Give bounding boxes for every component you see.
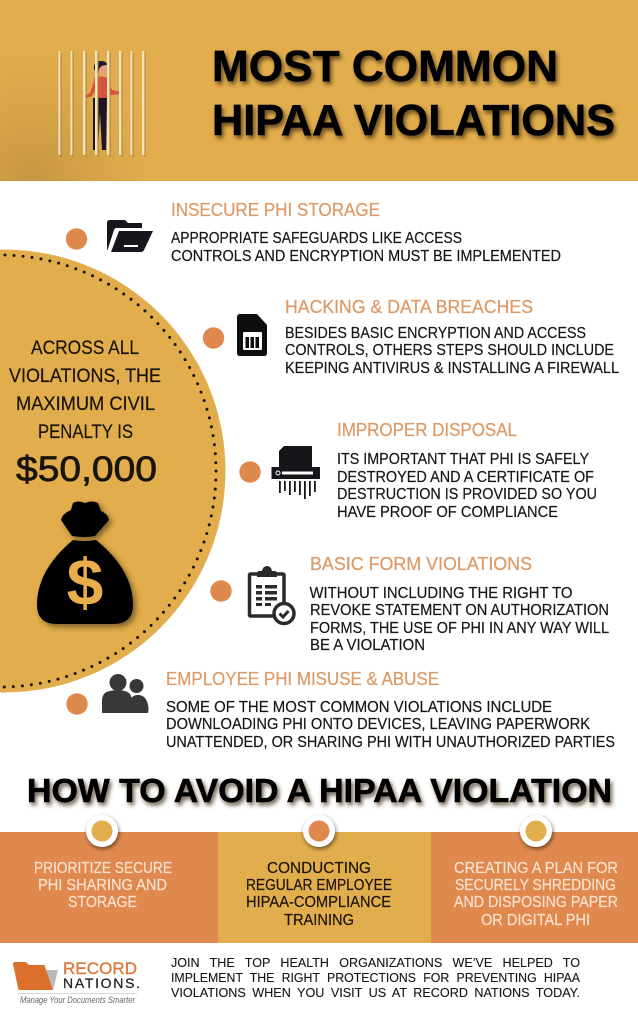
section: employee PHI misuse and abuse: UNATTENDED, OR SHARING PHI WITH UNAUTHORIZED PARTIES: [166, 734, 615, 751]
logo: Record Nations: RECORD: [63, 959, 137, 978]
penalty text: VIOLATIONS, THE: [9, 366, 161, 387]
icon: SIM card: [237, 314, 267, 356]
section: improper disposal: HAVE PROOF OF COMPLIANCE: [337, 504, 558, 521]
logo: Record Nations: [13, 959, 140, 1006]
penalty text: [9, 338, 161, 489]
panel: prioritize secure sharing: PRIORITIZE SECURE: [34, 860, 172, 877]
section: employee PHI misuse and abuse: DOWNLOADING PHI ONTO DEVICES, LEAVING PAPERWORK: [166, 716, 591, 733]
panel: prioritize secure sharing: STORAGE: [68, 894, 137, 911]
panel: employee training: CONDUCTING: [267, 860, 371, 877]
title: MOST COMMON: [212, 42, 558, 91]
section: employee PHI misuse and abuse: EMPLOYEE PHI MISUSE & ABUSE: [166, 669, 439, 689]
section: basic form violations: WITHOUT INCLUDING THE RIGHT TO: [310, 585, 572, 602]
section: basic form violations: REVOKE STATEMENT ON AUTHORIZATION: [310, 602, 609, 619]
section: basic form violations: FORMS, THE USE OF PHI IN ANY WAY WILL: [310, 620, 609, 637]
panel: shredding plan: AND DISPOSING PAPER: [454, 894, 618, 911]
section: improper disposal: DESTRUCTION IS PROVIDED SO YOU: [337, 486, 597, 503]
illustration: person behind bars: [58, 51, 146, 157]
penalty text: $50,000: [16, 450, 157, 489]
panel: prioritize secure sharing: [0, 832, 218, 943]
footer call to action: [171, 955, 580, 1000]
panel: shredding plan: [431, 832, 638, 943]
section: employee PHI misuse and abuse: [166, 669, 615, 751]
panel: prioritize secure sharing: PHI SHARING AND: [38, 877, 167, 894]
section: insecure PHI storage: [171, 200, 561, 265]
section: hacking and data breaches: BESIDES BASIC ENCRYPTION AND ACCESS: [285, 325, 586, 342]
footer call to action: JOIN THE TOP HEALTH ORGANIZATIONS WE’VE HELPED TO: [171, 955, 580, 970]
section: improper disposal: DESTROYED AND A CERTIFICATE OF: [337, 469, 594, 486]
footer call to action: IMPLEMENT THE RIGHT PROTECTIONS FOR PREVENTING HIPAA: [171, 970, 580, 985]
section: insecure PHI storage: CONTROLS AND ENCRYPTION MUST BE IMPLEMENTED: [171, 248, 561, 265]
icon: clipboard with check: [250, 566, 294, 624]
panel: shredding plan: SECURELY SHREDDING: [455, 877, 616, 894]
section: hacking and data breaches: [285, 297, 619, 377]
penalty text: PENALTY IS: [38, 422, 133, 443]
panel: shredding plan: OR DIGITAL PHI: [481, 912, 590, 929]
panel: shredding plan: CREATING A PLAN FOR: [454, 860, 618, 877]
penalty text: ACROSS ALL: [31, 338, 139, 359]
section: insecure PHI storage: APPROPRIATE SAFEGUARDS LIKE ACCESS: [171, 230, 462, 247]
icon: people: [102, 674, 148, 713]
logo: Record Nations: Manage Your Documents Smarter: [20, 995, 136, 1006]
panel: employee training: REGULAR EMPLOYEE: [246, 877, 392, 894]
panel: employee training: HIPAA-COMPLIANCE: [246, 894, 391, 911]
section: improper disposal: [337, 420, 597, 521]
icon: money bag: $: [67, 545, 103, 619]
section: basic form violations: [310, 554, 609, 654]
section: improper disposal: IMPROPER DISPOSAL: [337, 420, 517, 440]
section: improper disposal: ITS IMPORTANT THAT PHI IS SAFELY: [337, 451, 589, 468]
icon: shredder: [272, 446, 320, 499]
logo: Record Nations: NATIONS.: [63, 975, 140, 991]
section: employee PHI misuse and abuse: SOME OF THE MOST COMMON VIOLATIONS INCLUDE: [166, 699, 552, 716]
section: hacking and data breaches: CONTROLS, OTHERS STEPS SHOULD INCLUDE: [285, 342, 614, 359]
section: basic form violations: BE A VIOLATION: [310, 637, 425, 654]
marker dots: [66, 228, 261, 715]
panel: penalty circle: [0, 250, 226, 692]
icon: money bag: [37, 502, 133, 624]
step badges: [86, 815, 552, 847]
heading: how to avoid: HOW TO AVOID A HIPAA VIOLATION: [27, 772, 612, 809]
footer call to action: VIOLATIONS WHEN YOU VISIT US AT RECORD NATIONS TODAY.: [171, 985, 580, 1000]
panel: employee training: TRAINING: [284, 912, 354, 929]
penalty text: MAXIMUM CIVIL: [16, 394, 155, 415]
title: HIPAA VIOLATIONS: [212, 96, 615, 145]
section: hacking and data breaches: KEEPING ANTIVIRUS & INSTALLING A FIREWALL: [285, 360, 619, 377]
section: hacking and data breaches: HACKING & DATA BREACHES: [285, 297, 533, 317]
header banner: [0, 0, 638, 181]
icon: folder: [107, 220, 153, 252]
section: basic form violations: BASIC FORM VIOLATIONS: [310, 554, 532, 574]
section: insecure PHI storage: INSECURE PHI STORAGE: [171, 200, 380, 220]
panel: employee training: [218, 832, 431, 943]
title: [212, 42, 615, 145]
